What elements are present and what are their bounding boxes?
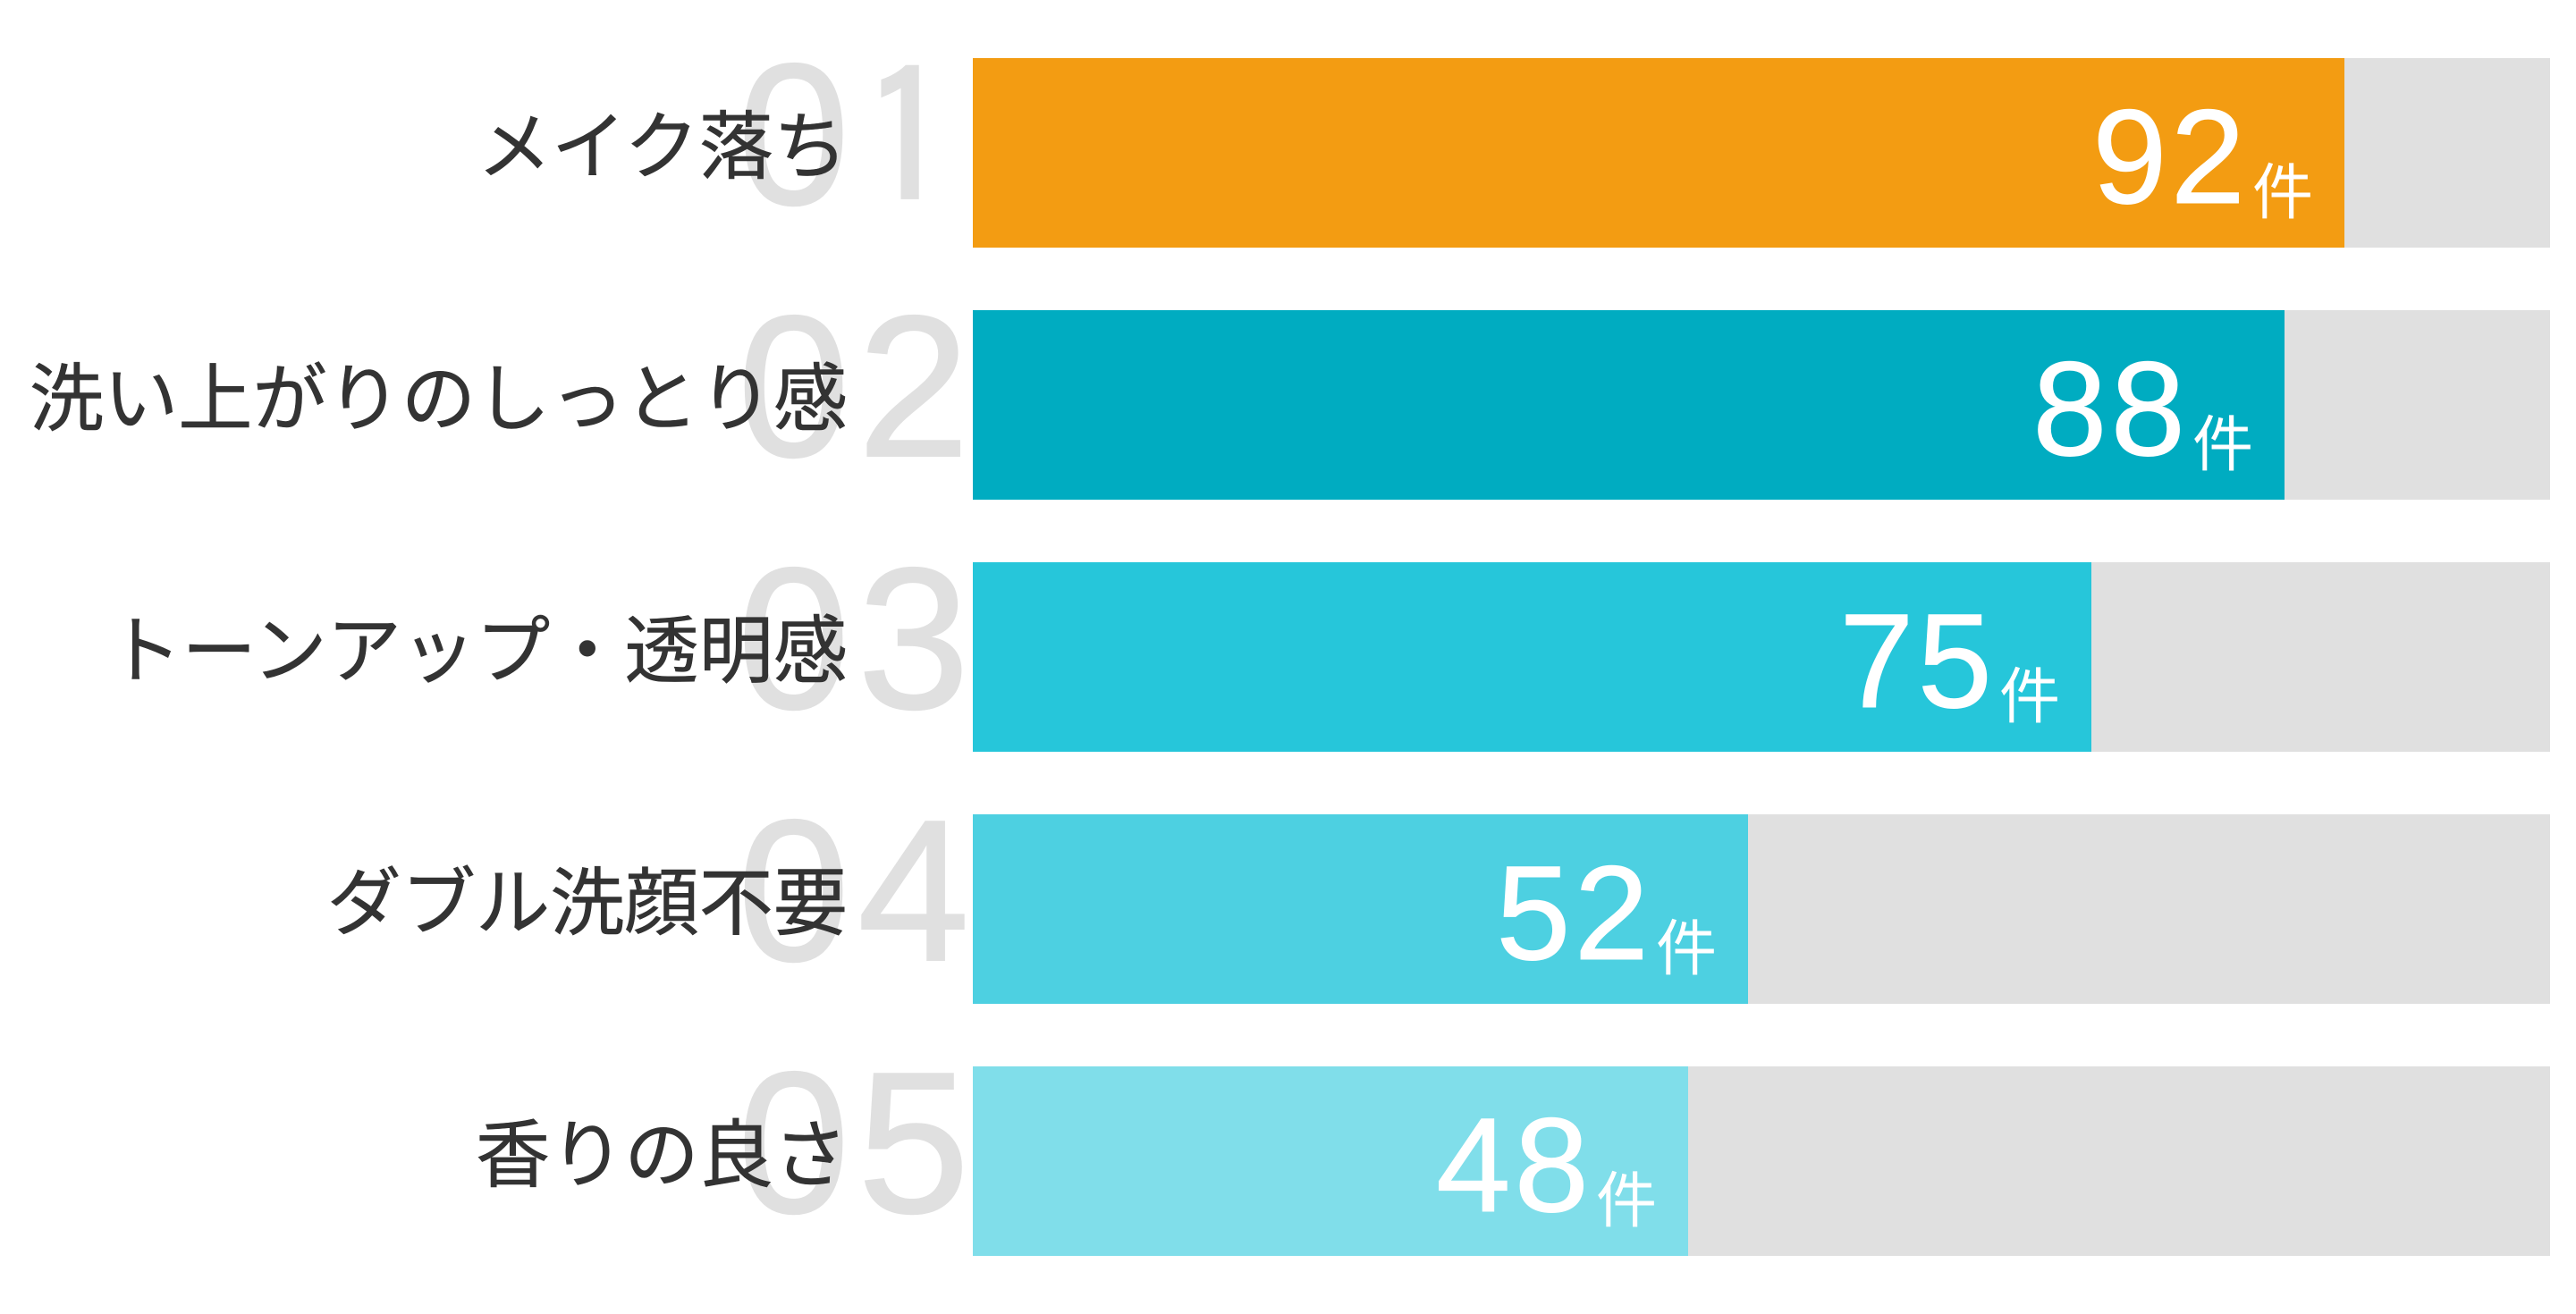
value 52: 52 (1496, 838, 1652, 988)
row 3: トーンアップ・透明感 (107, 526, 2550, 752)
bar fill 92 (973, 58, 2344, 248)
rank number 02: 02 (738, 274, 977, 499)
unit: 件 (1656, 915, 1717, 983)
value 75: 75 (1839, 585, 1996, 736)
bar fill 75 (973, 562, 2091, 752)
label: トーンアップ・透明感 (107, 610, 848, 693)
value 92: 92 (2092, 81, 2249, 232)
unit: 件 (2252, 159, 2313, 227)
bar track (973, 562, 2550, 752)
rank number 04: 04 (738, 778, 977, 1003)
unit: 件 (2192, 411, 2253, 479)
row 4: ダブル洗顔不要 (327, 778, 2550, 1004)
bar track (973, 310, 2550, 500)
bar track (973, 814, 2550, 1004)
label: ダブル洗顔不要 (327, 862, 848, 945)
unit: 件 (1999, 663, 2060, 731)
bar fill 48 (973, 1066, 1688, 1256)
value 48: 48 (1436, 1090, 1592, 1240)
rank number 05: 05 (738, 1030, 977, 1255)
row 5: 香りの良さ (476, 1030, 2550, 1256)
label: メイク落ち (477, 105, 848, 189)
bar track (973, 58, 2550, 248)
bar track (973, 1066, 2550, 1256)
label: 洗い上がりのしっとり感 (30, 358, 848, 441)
bar fill 88 (973, 310, 2285, 500)
label: 香りの良さ (476, 1114, 848, 1197)
value 88: 88 (2032, 333, 2189, 484)
row 2: 洗い上がりのしっとり感 (30, 274, 2550, 500)
bar fill 52 (973, 814, 1748, 1004)
rank number 01: 01 (738, 21, 962, 247)
row 1: メイク落ち (477, 21, 2550, 248)
rank number 03: 03 (738, 526, 977, 751)
unit: 件 (1596, 1167, 1657, 1235)
